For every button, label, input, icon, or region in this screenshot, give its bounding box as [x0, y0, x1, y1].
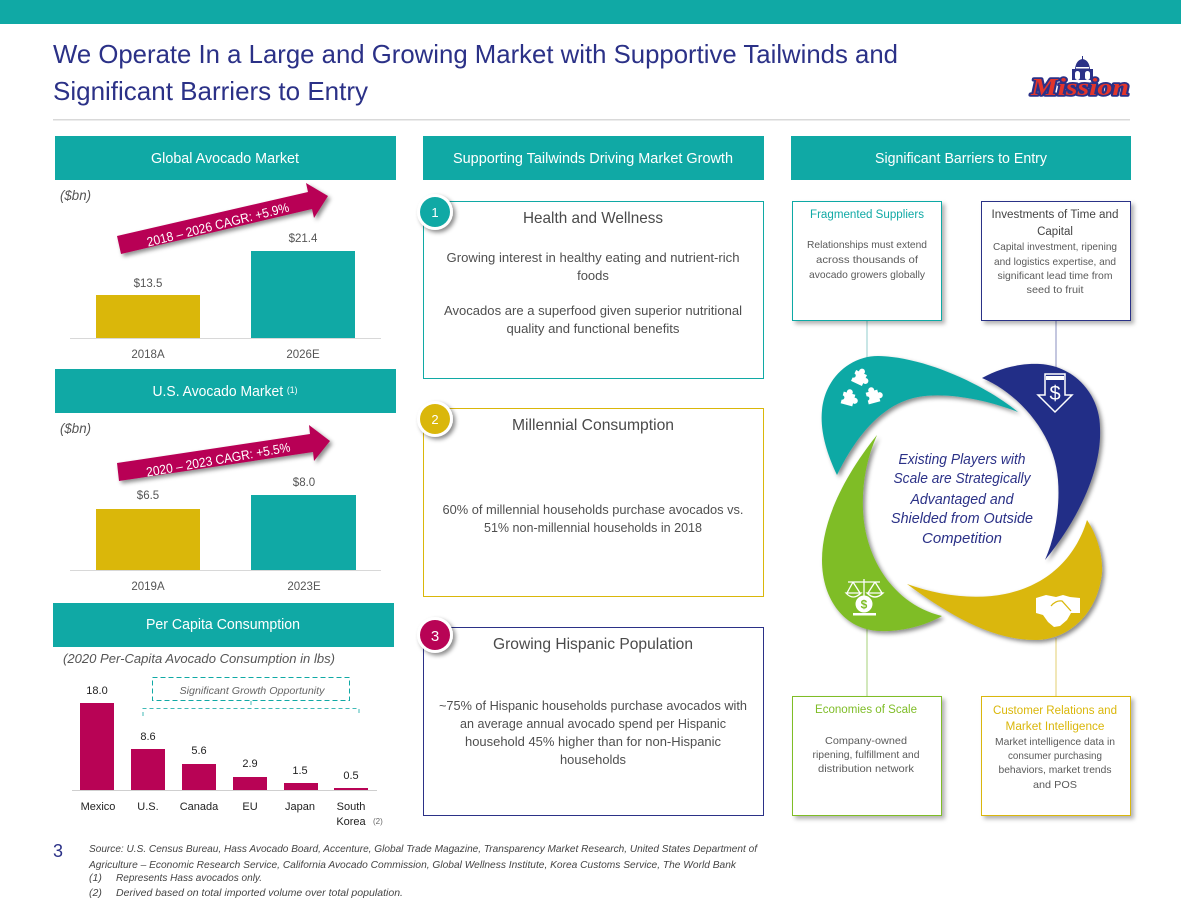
heading: US avocado market: U.S. Avocado Market: [152, 384, 288, 400]
callout: growth opportunity: [143, 678, 359, 716]
panel: US avocado market: [55, 369, 396, 593]
card: health and wellness: Growing interest in healthy eating and nutrient-rich: [446, 250, 740, 265]
card: investments of time and capital: Investments of Time and: [992, 209, 1118, 221]
badge 3: [417, 617, 453, 653]
card: economies of scale: Economies of Scale: [815, 704, 917, 716]
card: health and wellness: Health and Wellness: [523, 210, 663, 227]
page number: 3: [53, 841, 63, 861]
panel: barriers to entry: [791, 136, 1131, 816]
card: customer relations: Market intelligence data in: [995, 736, 1115, 748]
card: health and wellness: [424, 202, 764, 378]
arrow: CAGR 5.5%: 2020 – 2023 CAGR: +5.5%: [145, 439, 292, 480]
bar chart: US market: $6.5: [137, 490, 159, 502]
icon: scale with coin: [846, 579, 883, 616]
petal: navy: [982, 364, 1100, 560]
bar chart: per capita: EU: [242, 801, 258, 813]
badge 1: 1: [431, 205, 439, 220]
petal diagram: [822, 356, 1102, 640]
bar chart: per capita: Canada: [180, 801, 219, 813]
footnotes: (1): [89, 872, 102, 884]
bar chart: global market: $21.4: [289, 233, 318, 245]
footnotes: Agriculture – Economic Research Service, California Avocado Commission, Global Wellness Institute, Korea Customs Service, The World Bank: [88, 859, 737, 871]
chart subtitle: (2020 Per-Capita Avocado Consumption in lbs): [63, 651, 335, 666]
callout: growth opportunity: Significant Growth Opportunity: [180, 685, 325, 697]
center text: Shielded from Outside: [891, 511, 1033, 527]
footnotes: [88, 843, 758, 899]
Mission logo: Mission: [1030, 75, 1129, 101]
card: hispanic population: [424, 628, 764, 816]
card: health and wellness: quality and functional benefits: [506, 321, 680, 336]
bar chart: per capita: 2.9: [242, 758, 258, 770]
card: health and wellness: Avocados are a superfood given superior nutritional: [444, 303, 742, 318]
panel: supporting tailwinds: [417, 136, 764, 816]
card: economies of scale: Company-owned: [825, 735, 907, 747]
card: hispanic population: Growing Hispanic Population: [493, 636, 693, 653]
panel: per capita consumption: [53, 603, 394, 828]
petal: gold: [907, 520, 1102, 640]
arrow: CAGR 5.5%: [117, 425, 330, 481]
card: investments of time and capital: seed to fruit: [1026, 284, 1084, 296]
card: investments of time and capital: Capital investment, ripening: [993, 241, 1117, 253]
heading: per capita consumption: [53, 603, 394, 647]
unit label: ($bn): [60, 420, 91, 436]
arrow: CAGR 5.9%: 2018 – 2026 CAGR: +5.9%: [145, 200, 291, 250]
panel: global avocado market: [55, 136, 396, 361]
center text: Scale are Strategically: [894, 471, 1031, 487]
icon: puzzle pieces: [839, 365, 884, 407]
bar chart: per capita: Japan: [285, 801, 315, 813]
footnotes: Derived based on total imported volume over total population.: [116, 887, 403, 899]
title: Significant Barriers to Entry: [53, 76, 368, 106]
card: customer relations: Market Intelligence: [1006, 721, 1104, 733]
card: fragmented suppliers: [792, 202, 942, 320]
card: millennial consumption: 60% of millennial households purchase avocados vs.: [442, 502, 744, 517]
icon: scale with coin: $: [861, 598, 868, 612]
badge 1: [417, 194, 453, 230]
card: millennial consumption: Millennial Consumption: [512, 417, 674, 434]
bar chart: per capita: U.S.: [137, 801, 159, 813]
footnotes: Source: U.S. Census Bureau, Hass Avocado Board, Accenture, Global Trade Magazine, Transparency Market Research, United States Department of: [89, 843, 758, 855]
badge 3: 3: [431, 628, 439, 645]
card: investments of time and capital: and logistics expertise, and: [994, 256, 1116, 268]
center text: [891, 452, 1033, 547]
heading: tailwinds: Supporting Tailwinds Driving Market Growth: [453, 151, 733, 167]
card: fragmented suppliers: Relationships must extend: [807, 239, 927, 251]
heading: per capita consumption: Per Capita Consumption: [146, 617, 300, 633]
heading: barriers: Significant Barriers to Entry: [875, 151, 1048, 167]
card: millennial consumption: 51% non-millennial households in 2018: [484, 520, 702, 535]
top teal band: [0, 0, 1181, 24]
bar chart: per capita: Mexico: [81, 801, 115, 813]
bar chart: per capita: 1.5: [292, 765, 308, 777]
center text: Competition: [922, 531, 1002, 547]
badge 2: [417, 401, 453, 437]
card: hispanic population: households: [560, 752, 626, 767]
bar chart: per capita: [72, 685, 383, 828]
bar chart: global market: 2018A: [131, 349, 165, 361]
bar chart: global market: 2026E: [286, 349, 320, 361]
heading: tailwinds: [423, 136, 764, 180]
connector lines: [867, 320, 1056, 696]
footnotes: Represents Hass avocados only.: [116, 872, 262, 884]
card: investments of time and capital: Capital: [1037, 226, 1073, 238]
bar chart: per capita: 8.6: [140, 731, 156, 743]
divider: [53, 119, 1130, 120]
card: millennial consumption: [424, 408, 764, 596]
card: customer relations: behaviors, market trends: [998, 764, 1112, 776]
card: customer relations: consumer purchasing: [1008, 750, 1102, 762]
icon: dollar arrow: [1038, 374, 1072, 412]
bar chart: US market: [70, 477, 381, 593]
petal: green: [822, 435, 942, 631]
card: hispanic population: an average annual avocado spend per Hispanic: [460, 716, 726, 731]
card: fragmented suppliers: Fragmented Suppliers: [810, 209, 924, 221]
heading: global avocado market: Global Avocado Market: [151, 151, 299, 167]
bar chart: US market: $8.0: [293, 477, 315, 489]
bar chart: US market: 2023E: [287, 581, 321, 593]
card: hispanic population: household 45% higher than for non-Hispanic: [465, 734, 721, 749]
unit label: ($bn): [60, 187, 91, 203]
bar chart: per capita: Korea: [336, 816, 367, 828]
center text: Advantaged and: [910, 492, 1014, 508]
bar chart: per capita: 5.6: [191, 745, 207, 757]
center text: Existing Players with: [898, 452, 1026, 468]
icon: dollar arrow: $: [1049, 383, 1061, 405]
badge 2: 2: [431, 412, 439, 427]
heading: US avocado market: (1): [287, 385, 298, 395]
card: hispanic population: ~75% of Hispanic households purchase avocados with: [439, 698, 747, 713]
footnotes: (2): [89, 887, 102, 899]
bar chart: per capita: 0.5: [343, 770, 359, 782]
card: economies of scale: distribution network: [818, 763, 915, 775]
card: health and wellness: foods: [577, 268, 609, 283]
Mission logo: [1030, 56, 1129, 101]
title: We Operate In a Large and Growing Market with Supportive Tailwinds and: [53, 39, 898, 69]
icon: handshake: [1036, 595, 1080, 627]
card: investments of time and capital: [982, 202, 1130, 320]
heading: barriers: [791, 136, 1131, 180]
card: fragmented suppliers: avocado growers globally: [809, 269, 926, 281]
bar chart: per capita: South: [337, 801, 365, 813]
title: [53, 39, 898, 106]
card: economies of scale: ripening, fulfillment and: [812, 749, 920, 761]
bar chart: global market: $13.5: [134, 278, 162, 290]
card: customer relations: and POS: [1033, 779, 1077, 791]
card: fragmented suppliers: across thousands of: [816, 254, 918, 266]
heading: global avocado market: [55, 136, 396, 180]
card: economies of scale: [792, 696, 942, 816]
bar chart: per capita: 18.0: [86, 685, 108, 697]
heading: US avocado market: [55, 369, 396, 413]
card: customer relations: Customer Relations and: [993, 705, 1117, 717]
card: customer relations: [982, 696, 1130, 816]
bar chart: global market: [70, 233, 381, 361]
card: investments of time and capital: significant lead time from: [998, 270, 1113, 282]
arrow: CAGR 5.9%: [117, 183, 328, 254]
bar chart: per capita: (2): [373, 817, 383, 826]
petal: teal: [822, 356, 1018, 475]
bar chart: US market: 2019A: [131, 581, 165, 593]
